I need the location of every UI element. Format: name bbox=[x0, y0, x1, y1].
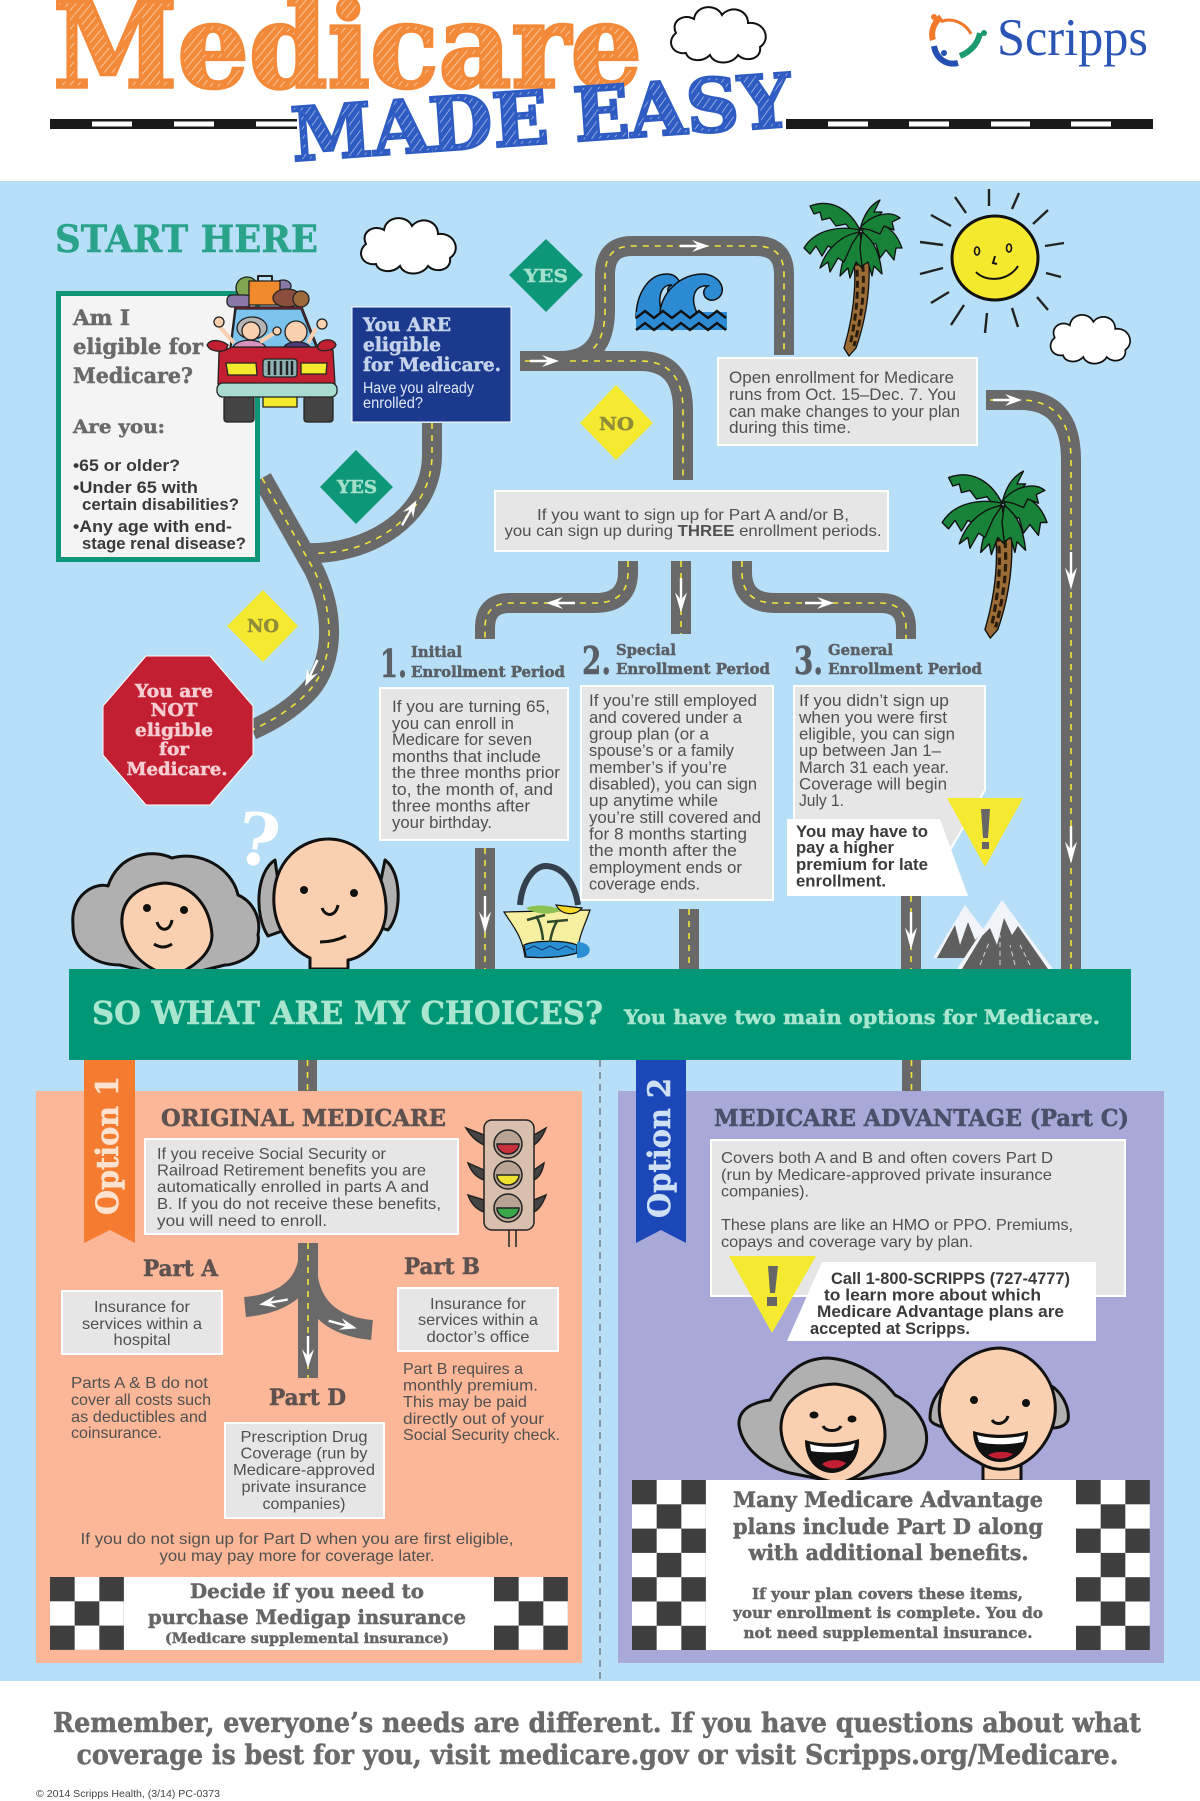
checkered finish: medigap: purchase Medigap insurance bbox=[148, 1605, 466, 1629]
heading: 2 special enrollment period bbox=[582, 638, 770, 683]
text box: special enrollment: up anytime while bbox=[589, 792, 718, 810]
text box: initial enrollment: you can enroll in bbox=[392, 715, 514, 733]
text: part B premium note: monthly premium. bbox=[403, 1378, 538, 1394]
question box: am I eligible: Am I bbox=[72, 305, 130, 330]
text box: part B: doctor’s office bbox=[426, 1329, 530, 1346]
text: costs note: Parts A & B do not bbox=[71, 1375, 209, 1392]
stop sign: not eligible bbox=[103, 656, 253, 805]
checkered finish: medigap: (Medicare supplemental insurance) bbox=[165, 1631, 449, 1647]
header road line bbox=[50, 119, 1153, 129]
banner: so what are my choices: You have two main options for Medicare. bbox=[623, 1005, 1100, 1029]
text box: open enrollment: runs from Oct. 15–Dec. 7. You bbox=[729, 386, 956, 404]
text box: initial enrollment: the three months prior bbox=[392, 764, 561, 782]
text box: initial enrollment: three months after bbox=[392, 798, 531, 816]
checkered finish: medigap: Decide if you need to bbox=[190, 1579, 424, 1603]
text box: part D: private insurance bbox=[242, 1479, 367, 1496]
question box: am I eligible: eligible for bbox=[73, 334, 204, 359]
text box: special enrollment: for 8 months starting bbox=[589, 826, 747, 844]
palm tree top bbox=[804, 200, 902, 356]
text: part B premium note: This may be paid bbox=[403, 1394, 527, 1411]
stop sign: not eligible: You are bbox=[134, 681, 213, 702]
text box: part A: Insurance for bbox=[94, 1299, 191, 1316]
ribbon: option 2: Option 2 bbox=[642, 1078, 678, 1218]
Scripps logo bbox=[931, 9, 1148, 67]
sign: YES top: YES bbox=[523, 266, 568, 287]
text box: special enrollment: and covered under a bbox=[589, 709, 743, 727]
text box: part D: Coverage (run by bbox=[240, 1446, 368, 1462]
sign: NO left bbox=[227, 590, 298, 662]
roads: three enrollment branches bbox=[485, 561, 906, 639]
cloud bbox=[361, 218, 456, 274]
text box: initial enrollment bbox=[380, 688, 568, 840]
question box: am I eligible: •65 or older? bbox=[73, 457, 180, 475]
heading: part D: Part D bbox=[269, 1385, 346, 1411]
text box: advantage coverage: copays and coverage vary by plan. bbox=[721, 1234, 973, 1251]
heading: 1 initial enrollment period: Enrollment Period bbox=[411, 663, 565, 681]
heading: part A: Part A bbox=[143, 1256, 219, 1282]
question box: am I eligible: Medicare? bbox=[73, 363, 193, 388]
text box: open enrollment bbox=[718, 358, 977, 445]
panel: you are eligible: enrolled? bbox=[363, 395, 423, 412]
text box: part D: companies) bbox=[262, 1496, 346, 1513]
heading: 3 general enrollment period: 3. bbox=[794, 638, 823, 683]
panel: you are eligible: Have you already bbox=[363, 380, 474, 397]
callout: higher premium: premium for late bbox=[796, 856, 928, 874]
text box: special enrollment: member’s if you’re bbox=[589, 759, 727, 777]
cloud right bbox=[1051, 315, 1130, 364]
question box: am I eligible: stage renal disease? bbox=[82, 535, 246, 553]
title: Made Easy: MADE EASY bbox=[288, 58, 795, 179]
text box: automatic enrollment: you will need to enroll. bbox=[157, 1213, 327, 1230]
text box: part A bbox=[62, 1291, 222, 1354]
text box: initial enrollment: If you are turning 65, bbox=[392, 698, 550, 716]
text box: initial enrollment: months that include bbox=[392, 748, 541, 766]
callout: call 1-800-SCRIPPS: accepted at Scripps. bbox=[810, 1320, 970, 1338]
text box: special enrollment: disabled), you can sign bbox=[589, 776, 757, 794]
callout: call 1-800-SCRIPPS: Call 1-800-SCRIPPS (727-4777) bbox=[831, 1270, 1070, 1288]
panel: option 1 original medicare bbox=[36, 1060, 582, 1663]
text box: three enrollment periods: If you want to sign up for Part A and/or B, bbox=[537, 507, 849, 524]
checkered finish: advantage benefits: plans include Part D along bbox=[733, 1514, 1043, 1539]
callout: higher premium: pay a higher bbox=[796, 839, 895, 857]
callout: call 1-800-SCRIPPS: Medicare Advantage plans are bbox=[817, 1303, 1064, 1321]
banner: so what are my choices: SO WHAT ARE MY CHOICES? bbox=[92, 994, 603, 1032]
Scripps logo: Scripps bbox=[997, 9, 1148, 67]
heading: 1 initial enrollment period: Initial bbox=[411, 643, 462, 661]
question box: am I eligible bbox=[58, 294, 258, 560]
sign: NO top: NO bbox=[599, 414, 634, 435]
checkered finish: advantage benefits: If your plan covers these items, bbox=[752, 1585, 1023, 1603]
icon: question mark: ? bbox=[232, 795, 285, 885]
icon: beach basket bbox=[504, 866, 590, 958]
question box: am I eligible: •Any age with end- bbox=[73, 518, 232, 536]
road: fork to parts A, B, D bbox=[245, 1243, 372, 1378]
panel: you are eligible: You ARE bbox=[362, 314, 451, 336]
checkered finish: advantage benefits: your enrollment is complete. You do bbox=[732, 1604, 1043, 1622]
warning triangle: late enrollment bbox=[947, 798, 1023, 867]
panel: you are eligible bbox=[352, 307, 511, 422]
checkered finish: advantage benefits: not need supplemental insurance. bbox=[744, 1624, 1032, 1642]
roads: down to choices bar bbox=[479, 848, 917, 969]
heading: 3 general enrollment period: Enrollment Period bbox=[828, 660, 982, 678]
icon: waves bbox=[636, 274, 727, 330]
text box: general enrollment: July 1. bbox=[799, 792, 844, 810]
heading: 1 initial enrollment period: 1. bbox=[380, 641, 407, 686]
question box: am I eligible: Are you: bbox=[72, 416, 165, 438]
text box: special enrollment: group plan (or a bbox=[589, 726, 710, 744]
text box: initial enrollment: to, the month of, and bbox=[392, 781, 553, 799]
footer message: coverage is best for you, visit medicare.gov or visit Scripps.org/Medicare. bbox=[76, 1740, 1118, 1771]
footer message bbox=[53, 1708, 1141, 1771]
panel: option 2 medicare advantage bbox=[618, 1060, 1164, 1663]
text box: three enrollment periods: you can sign up during THREE enrollment periods. bbox=[504, 523, 882, 540]
text box: automatic enrollment: Railroad Retirement benefits you are bbox=[157, 1162, 426, 1180]
checkered finish: advantage benefits bbox=[632, 1480, 1150, 1650]
text box: special enrollment: spouse’s or a family bbox=[589, 742, 735, 760]
copyright: © 2014 Scripps Health, (3/14) PC-0373 bbox=[36, 1788, 220, 1800]
heading: original medicare: ORIGINAL MEDICARE bbox=[161, 1105, 446, 1132]
heading: start here: START HERE bbox=[55, 217, 318, 261]
text: part B premium note bbox=[403, 1361, 560, 1444]
text box: open enrollment: Open enrollment for Medicare bbox=[729, 369, 954, 387]
checkered finish: advantage benefits: Many Medicare Advantage bbox=[733, 1487, 1043, 1512]
illustration: puzzled man bbox=[259, 839, 398, 969]
text box: three enrollment periods bbox=[495, 491, 888, 551]
text box: part D: Medicare-approved bbox=[233, 1462, 375, 1479]
callout: higher premium: enrollment. bbox=[796, 872, 886, 890]
ribbon: option 1: Option 1 bbox=[90, 1076, 126, 1215]
stop sign: not eligible: eligible bbox=[135, 720, 213, 741]
text box: part B: Insurance for bbox=[430, 1296, 527, 1313]
text box: special enrollment: employment ends or bbox=[589, 859, 743, 877]
stop sign: not eligible: NOT bbox=[150, 700, 198, 721]
text box: automatic enrollment: If you receive Social Security or bbox=[157, 1146, 387, 1163]
text box: general enrollment: March 31 each year. bbox=[799, 759, 949, 777]
text: part D note: you may pay more for coverage later. bbox=[160, 1548, 434, 1565]
footer message: Remember, everyone’s needs are different. If you have questions about what bbox=[53, 1708, 1141, 1739]
stop sign: not eligible: Medicare. bbox=[126, 759, 228, 780]
sign: NO top bbox=[580, 385, 653, 460]
ribbon: option 2 bbox=[636, 1060, 686, 1243]
heading: 1 initial enrollment period bbox=[380, 641, 565, 686]
text box: advantage coverage bbox=[711, 1140, 1125, 1296]
text box: automatic enrollment: automatically enrolled in parts A and bbox=[157, 1179, 429, 1196]
illustration: happy woman bbox=[739, 1358, 927, 1483]
road stub to option 1 bbox=[298, 1060, 317, 1091]
text box: advantage coverage: These plans are like an HMO or PPO. Premiums, bbox=[721, 1217, 1073, 1234]
text box: part B bbox=[398, 1288, 558, 1351]
sign: YES top bbox=[509, 239, 583, 312]
panel: you are eligible: for Medicare. bbox=[363, 354, 501, 376]
text box: advantage coverage: Covers both A and B and often covers Part D bbox=[721, 1150, 1053, 1167]
text: part B premium note: Part B requires a bbox=[403, 1361, 523, 1378]
text box: general enrollment: If you didn’t sign up bbox=[799, 692, 949, 710]
text box: general enrollment: when you were first bbox=[798, 709, 947, 727]
text box: special enrollment: the month after the bbox=[589, 842, 737, 860]
text: part B premium note: directly out of your bbox=[403, 1411, 545, 1428]
callout: call 1-800-SCRIPPS bbox=[787, 1262, 1096, 1341]
text box: open enrollment: during this time. bbox=[729, 419, 851, 437]
heading: 3 general enrollment period bbox=[794, 638, 982, 683]
heading: medicare advantage: MEDICARE ADVANTAGE (Part C) bbox=[714, 1105, 1129, 1132]
text box: part D: Prescription Drug bbox=[240, 1429, 368, 1446]
text: costs note: as deductibles and bbox=[71, 1409, 207, 1426]
icon: traffic light bbox=[466, 1120, 546, 1247]
question box: am I eligible: certain disabilities? bbox=[82, 496, 239, 514]
text: part B premium note: Social Security check. bbox=[403, 1427, 560, 1444]
text box: general enrollment bbox=[794, 686, 985, 850]
banner: so what are my choices bbox=[69, 969, 1131, 1060]
heading: 2 special enrollment period: Special bbox=[616, 641, 676, 659]
ribbon: option 1 bbox=[84, 1060, 135, 1243]
checkered finish: advantage benefits: with additional benefits. bbox=[748, 1540, 1028, 1565]
panel: you are eligible: eligible bbox=[363, 334, 441, 356]
warning triangle: call Scripps bbox=[729, 1256, 816, 1333]
text box: special enrollment: you’re still covered and bbox=[589, 809, 761, 827]
sign: YES left: YES bbox=[336, 477, 377, 498]
text box: special enrollment: coverage ends. bbox=[589, 876, 700, 894]
heading: part B: Part B bbox=[404, 1254, 480, 1280]
text box: advantage coverage: companies). bbox=[721, 1184, 809, 1200]
text box: part A: services within a bbox=[82, 1316, 202, 1333]
callout: higher premium: You may have to bbox=[796, 823, 928, 841]
heading: 3 general enrollment period: General bbox=[828, 641, 893, 659]
illustration: happy man bbox=[930, 1348, 1068, 1481]
icon: car with luggage bbox=[207, 276, 337, 422]
text box: general enrollment: up between Jan 1– bbox=[799, 742, 942, 760]
text box: part D bbox=[225, 1423, 384, 1518]
callout: higher premium bbox=[787, 819, 968, 896]
stop sign: not eligible: for bbox=[159, 739, 190, 760]
text box: initial enrollment: Medicare for seven bbox=[392, 731, 532, 749]
text: part D note bbox=[80, 1531, 514, 1565]
text box: special enrollment bbox=[581, 686, 773, 900]
heading: 2 special enrollment period: Enrollment Period bbox=[616, 660, 770, 678]
roads: upper loop bbox=[520, 240, 784, 480]
question box: am I eligible: •Under 65 with bbox=[73, 479, 198, 497]
palm tree right bbox=[942, 471, 1047, 638]
text: costs note: cover all costs such bbox=[71, 1392, 211, 1409]
header cloud bbox=[671, 7, 766, 62]
text: part D note: If you do not sign up for Part D when you are first eligible, bbox=[80, 1531, 514, 1548]
sign: NO left: NO bbox=[247, 616, 279, 637]
text box: open enrollment: can make changes to your plan bbox=[729, 403, 960, 421]
text box: part B: services within a bbox=[418, 1312, 538, 1329]
text box: advantage coverage: (run by Medicare-approved private insurance bbox=[721, 1167, 1052, 1184]
center dashed divider bbox=[599, 1060, 601, 1682]
road: far right highway bbox=[986, 394, 1077, 970]
road stub to option 2 bbox=[902, 1060, 921, 1091]
text box: general enrollment: Coverage will begin bbox=[799, 776, 947, 794]
text box: automatic enrollment bbox=[145, 1139, 458, 1234]
heading: 2 special enrollment period: 2. bbox=[582, 638, 611, 683]
sign: YES left bbox=[320, 450, 393, 524]
text box: part A: hospital bbox=[114, 1332, 170, 1349]
text box: initial enrollment: your birthday. bbox=[392, 814, 492, 832]
text box: general enrollment: eligible, you can sign bbox=[799, 726, 955, 744]
text box: special enrollment: If you’re still employed bbox=[589, 692, 757, 710]
road: eligibility yes branch bbox=[304, 423, 432, 553]
road: eligibility no branch bbox=[252, 478, 329, 730]
sun bbox=[920, 189, 1064, 333]
text box: automatic enrollment: B. If you do not receive these benefits, bbox=[157, 1196, 441, 1213]
text: costs note bbox=[71, 1375, 211, 1442]
illustration: puzzled woman bbox=[73, 854, 259, 978]
checkered finish: medigap bbox=[50, 1577, 568, 1650]
text: costs note: coinsurance. bbox=[71, 1425, 162, 1442]
icon: mountains bbox=[933, 900, 1053, 969]
callout: call 1-800-SCRIPPS: to learn more about which bbox=[824, 1286, 1041, 1304]
